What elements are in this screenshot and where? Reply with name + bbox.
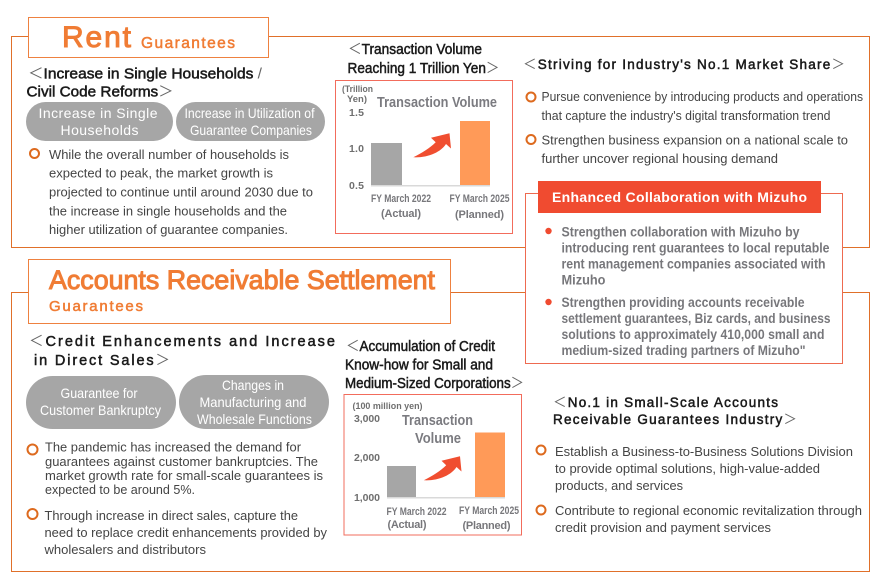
pill: guarantee for customer bankruptcy: Customer Bankruptcy [40,402,161,418]
heading: increase in single households [26,66,263,100]
heading: credit enhancements [29,334,335,369]
pill: changes in manufacturing: Wholesale Functions [197,411,312,427]
bullet: settlement guarantees collaboration: Strengthen providing accounts receivable [562,294,805,310]
chart: accounts receivable transaction volume [344,394,522,535]
bullet: market growth text [30,147,313,237]
heading: no.1 in small-scale: ＜No.1 in Small-Scale Accounts [553,395,778,410]
bullet: business-to-business: to provide optimal solutions, high-value-added [555,461,820,476]
bullet: direct sales [28,508,327,557]
bar: FY March 2022 [387,466,416,497]
heading: striving for no.1 market share: ＜Striving for Industry's No.1 Market Share＞ [523,57,845,72]
bar: FY March 2022 [371,143,402,185]
panel: accounts receivable settlement guarantees [12,260,870,572]
title: accounts receivable settlement guarantees [28,260,450,324]
chart title: Transaction [402,412,473,429]
bullet: business-to-business: Establish a Business-to-Business Solutions Division [555,444,853,459]
axis labels: (Trillion [342,84,373,95]
bullet: regional revitalization: credit provision and payment services [555,520,771,535]
x labels: (Planned) [455,209,504,221]
chart: rent transaction volume [336,80,512,234]
axis labels: 2,000 [354,452,380,464]
bullet: market growth text: higher utilization of guarantee companies. [49,222,288,237]
pill: guarantee for customer bankruptcy: Guarantee for [60,385,138,401]
heading: accumulation of credit know-how: Know-how for Small and [345,358,493,374]
bullet: pandemic demand: guarantees against customer bankruptcies. The [45,454,318,469]
pill: changes in manufacturing: Manufacturing and [200,394,306,410]
title: rent guarantees: Guarantees [141,35,235,52]
bullet: rent guarantees collaboration: Mizuho [562,272,606,288]
bullet: rent guarantees collaboration: rent management companies associated with [562,256,826,272]
chart title: Volume [415,430,461,447]
title: accounts receivable settlement guarantees: Accounts Receivable Settlement [49,265,435,295]
axis labels: 1,000 [354,492,380,504]
pill: increase in utilization: Increase in Utilization of [184,105,315,121]
bullet: settlement guarantees collaboration [545,294,831,358]
bullet: pandemic demand: expected to be around 5%. [45,482,195,497]
pill: changes in manufacturing: Changes in [222,377,284,393]
heading: accumulation of credit know-how [345,339,524,392]
heading: no.1 in small-scale: Receivable Guarantees Industry＞ [553,412,797,427]
x labels: (Actual) [381,208,421,220]
pill: changes in manufacturing [179,375,329,429]
heading: increase in single households: Civil Code Reforms ＞ [26,84,174,100]
bullet: pandemic demand: The pandemic has increased the demand for [45,440,302,454]
arrow: growth [413,133,451,157]
heading: credit enhancements: ＜Credit Enhancements and Increase [29,334,335,350]
bullet: rent guarantees collaboration: Strengthen collaboration with Mizuho by [562,224,800,240]
heading: accumulation of credit know-how: ＜Accumulation of Credit [346,339,495,355]
bullet: strengthen business expansion [526,132,848,166]
x labels: (Planned) [462,520,511,532]
chart title [402,412,473,447]
bullet: market growth text: expected to peak, the market growth is [49,166,273,180]
bullet: market growth text: While the overall number of households is [49,147,289,162]
pill: increase in utilization [176,102,325,141]
bullet: direct sales: wholesalers and distributors [44,542,206,557]
bullet: business-to-business [536,444,853,493]
title: rent guarantees [28,18,268,58]
bullet: regional revitalization: Contribute to regional economic revitalization through [555,503,862,518]
arrow: growth [424,456,462,480]
x labels: FY March 2022 [371,193,431,205]
bullet: direct sales: need to replace credit enhancements provided by [44,525,327,540]
axis labels: 1.5 [349,107,364,119]
title: accounts receivable settlement guarantees: Guarantees [49,298,143,315]
bullet: strengthen business expansion: Strengthen business expansion on a national scale to [542,132,848,148]
bullet: regional revitalization [536,503,862,535]
x labels: FY March 2025 [459,505,519,517]
header: enhanced collaboration [538,181,821,213]
header: enhanced collaboration: Enhanced Collaboration with Mizuho [552,189,807,205]
panel: enhanced collaboration with mizuho [526,181,842,364]
bar: FY March 2025 [460,121,490,185]
axis labels [342,84,373,192]
pill: increase in single households [26,102,173,141]
pill: increase in single households: Increase in Single [38,105,158,121]
axis labels: 0.5 [349,180,364,192]
bullet: market growth text: projected to continue until around 2030 due to [49,184,313,200]
bar: FY March 2025 [475,432,505,497]
x labels [371,193,510,221]
bullet: pursue convenience: that capture the industry's digital transformation trend [542,108,830,123]
bullet: rent guarantees collaboration [545,224,830,288]
chart title: Transaction Volume [377,94,497,111]
axis labels: 3,000 [354,413,380,425]
axis labels: Yen) [347,94,367,105]
axis labels: (100 million yen) [352,401,422,412]
bullet: pursue convenience [526,89,863,123]
bullet: market growth text: the increase in single households and the [49,204,287,218]
bullet: settlement guarantees collaboration: solutions to approximately 410,000 small and [562,326,824,342]
panel: rent guarantees [12,18,870,248]
bullet: rent guarantees collaboration: introducing rent guarantees to local reputable [562,240,830,256]
axis labels: 1.0 [349,143,364,155]
bullet: settlement guarantees collaboration: medium-sized trading partners of Mizuho" [562,342,806,358]
bullet: direct sales: Through increase in direct sales, capture the [44,508,298,523]
pill: increase in single households: Households [60,122,138,138]
x labels: (Actual) [388,519,427,531]
bullet: pandemic demand: market growth rate for small-scale guarantees is [45,468,323,483]
x labels: FY March 2025 [450,193,510,205]
bullet: settlement guarantees collaboration: settlement guarantees, Biz cards, and business [562,310,831,326]
heading: transaction volume reaching 1 trillion yen: Reaching 1 Trillion Yen＞ [348,61,500,77]
bullet: business-to-business: products, and services [555,478,683,493]
axis labels [352,401,422,504]
heading: transaction volume reaching 1 trillion yen: ＜Transaction Volume [348,42,482,58]
heading: credit enhancements: in Direct Sales＞ [34,353,170,369]
pill: guarantee for customer bankruptcy [26,376,176,429]
heading: accumulation of credit know-how: Medium-Sized Corporations＞ [345,376,524,392]
bullet: pandemic demand [28,440,323,497]
x labels [386,505,519,532]
heading: no.1 in small-scale [553,395,797,427]
bullet: strengthen business expansion: further uncover regional housing demand [542,151,778,166]
title: rent guarantees: Rent [62,21,132,54]
pill: increase in utilization: Guarantee Companies [190,122,312,138]
heading: transaction volume reaching 1 trillion yen [348,42,500,77]
x labels: FY March 2022 [386,506,446,518]
heading: increase in single households: ＜Increase in Single Households / [28,66,263,82]
